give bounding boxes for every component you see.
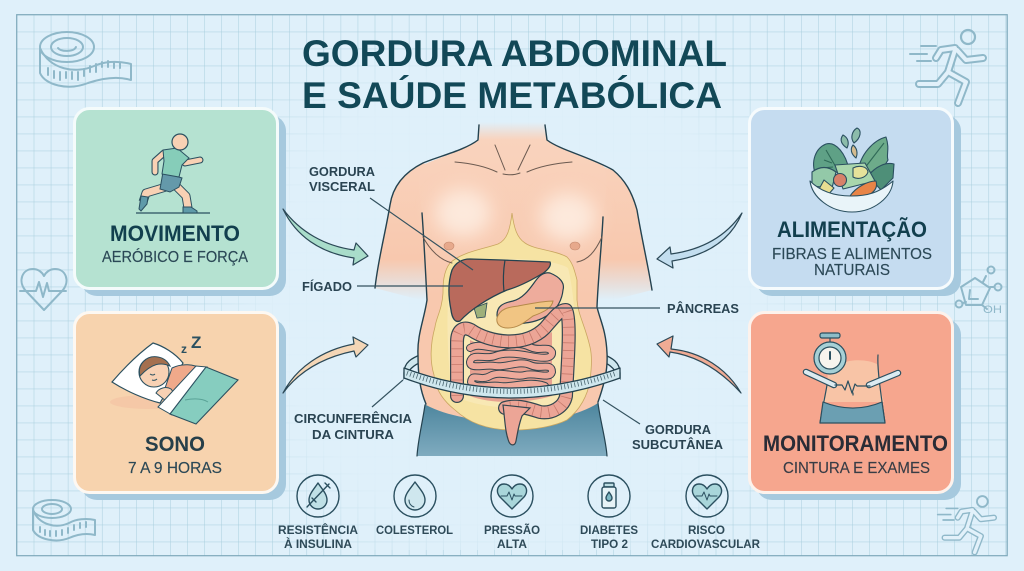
decorative icon: tape measure top left — [40, 32, 131, 87]
chest highlights — [435, 189, 596, 241]
label: pâncreas: PÂNCREAS — [667, 301, 739, 316]
risk: pressão alta: ALTA — [497, 537, 527, 551]
icon: heart — [686, 475, 728, 517]
title: E SAÚDE METABÓLICA — [302, 74, 722, 116]
decorative icon: tape measure bottom left — [33, 500, 95, 540]
risk: diabetes tipo 2: TIPO 2 — [591, 537, 628, 551]
small intestine — [470, 332, 552, 402]
label: gordura subcutânea — [632, 422, 724, 452]
subtitle: monitoramento: CINTURA E EXAMES — [783, 460, 930, 477]
icon: drop — [394, 475, 436, 517]
label: gordura subcutânea: GORDURA — [645, 422, 712, 437]
arrow: alimentação to torso — [657, 213, 742, 268]
decorative icon: heart with pulse — [20, 269, 66, 310]
panel: movimento — [74, 108, 286, 296]
title: GORDURA ABDOMINAL — [302, 33, 727, 74]
visceral fat — [431, 213, 592, 430]
abdominal cavity — [448, 259, 576, 408]
left arm — [375, 163, 428, 302]
icon: sleeping person — [110, 343, 238, 424]
icon: sleep letters: z — [181, 342, 187, 356]
pancreas — [497, 301, 553, 328]
label: gordura subcutânea: SUBCUTÂNEA — [632, 437, 724, 452]
icon: insulin — [297, 475, 339, 517]
risk: pressão alta: PRESSÃO — [484, 522, 540, 537]
risk: diabetes tipo 2: DIABETES — [580, 523, 638, 537]
waist tape back — [404, 354, 620, 378]
waist tape front — [404, 368, 620, 398]
icon: runner — [136, 134, 210, 213]
decorative text: OH: OH — [983, 304, 1002, 316]
subtitle: alimentação: NATURAIS — [814, 262, 890, 279]
colon — [457, 310, 569, 412]
pants — [417, 402, 607, 456]
risk: resistência à insulina — [278, 475, 358, 551]
risk: colesterol — [376, 475, 453, 537]
outlines — [375, 125, 652, 456]
label: circunferência da cintura — [294, 411, 413, 442]
label: gordura visceral — [309, 164, 376, 194]
label: fígado: FÍGADO — [302, 279, 352, 294]
subtitle: sono: 7 A 9 HORAS — [128, 460, 222, 477]
arrow: movimento to torso — [283, 209, 368, 265]
rectum — [503, 405, 530, 445]
heading: monitoramento: MONITORAMENTO — [763, 431, 948, 456]
title — [302, 33, 727, 116]
panel: alimentação — [750, 108, 961, 296]
risk: risco cardiovascular — [651, 475, 760, 551]
illustration: torso with organs — [375, 122, 652, 456]
gallbladder green — [474, 303, 487, 318]
subtitle: alimentação — [772, 246, 932, 279]
icon: salad bowl — [810, 128, 894, 212]
risk: diabetes tipo 2 — [580, 475, 638, 551]
decorative icon: molecule — [956, 266, 1002, 309]
label: gordura visceral: VISCERAL — [309, 179, 375, 194]
icon: sleep letters: Z — [191, 333, 201, 352]
leader lines — [357, 198, 660, 424]
liver — [449, 259, 550, 321]
liver divider — [503, 260, 505, 292]
label: circunferência da cintura: DA CINTURA — [312, 427, 395, 442]
subtitle: movimento: AERÓBICO E FORÇA — [102, 249, 249, 266]
icon: medicine bottle — [588, 475, 630, 517]
right arm — [597, 165, 652, 304]
icon: sleep letters — [181, 333, 201, 356]
panel: sono — [74, 312, 286, 500]
label: gordura visceral: GORDURA — [309, 164, 376, 179]
panel: monitoramento — [750, 312, 961, 500]
decorative icon: runner bottom right — [938, 496, 994, 552]
risk: resistência à insulina: À INSULINA — [284, 536, 352, 551]
heading: sono: SONO — [145, 433, 205, 456]
risk: risco cardiovascular: CARDIOVASCULAR — [651, 537, 760, 551]
nipples — [444, 242, 580, 250]
arrow: sono to torso — [283, 337, 368, 393]
arrow: monitoramento to torso — [657, 336, 741, 393]
risk: pressão alta — [484, 475, 540, 551]
risk: colesterol: COLESTEROL — [376, 523, 453, 537]
decorative icon: runner top right — [910, 30, 983, 103]
label: circunferência da cintura: CIRCUNFERÊNCIA — [294, 411, 413, 426]
heading: alimentação: ALIMENTAÇÃO — [777, 217, 927, 242]
risk: resistência à insulina: RESISTÊNCIA — [278, 522, 358, 537]
icon: waist monitoring — [806, 333, 898, 423]
icon: heart pulse — [491, 475, 533, 517]
torso skin — [418, 122, 607, 422]
stomach — [497, 273, 563, 324]
risk: risco cardiovascular: RISCO — [688, 523, 725, 537]
heading: movimento: MOVIMENTO — [110, 221, 240, 246]
subtitle: alimentação: FIBRAS E ALIMENTOS — [772, 246, 932, 263]
